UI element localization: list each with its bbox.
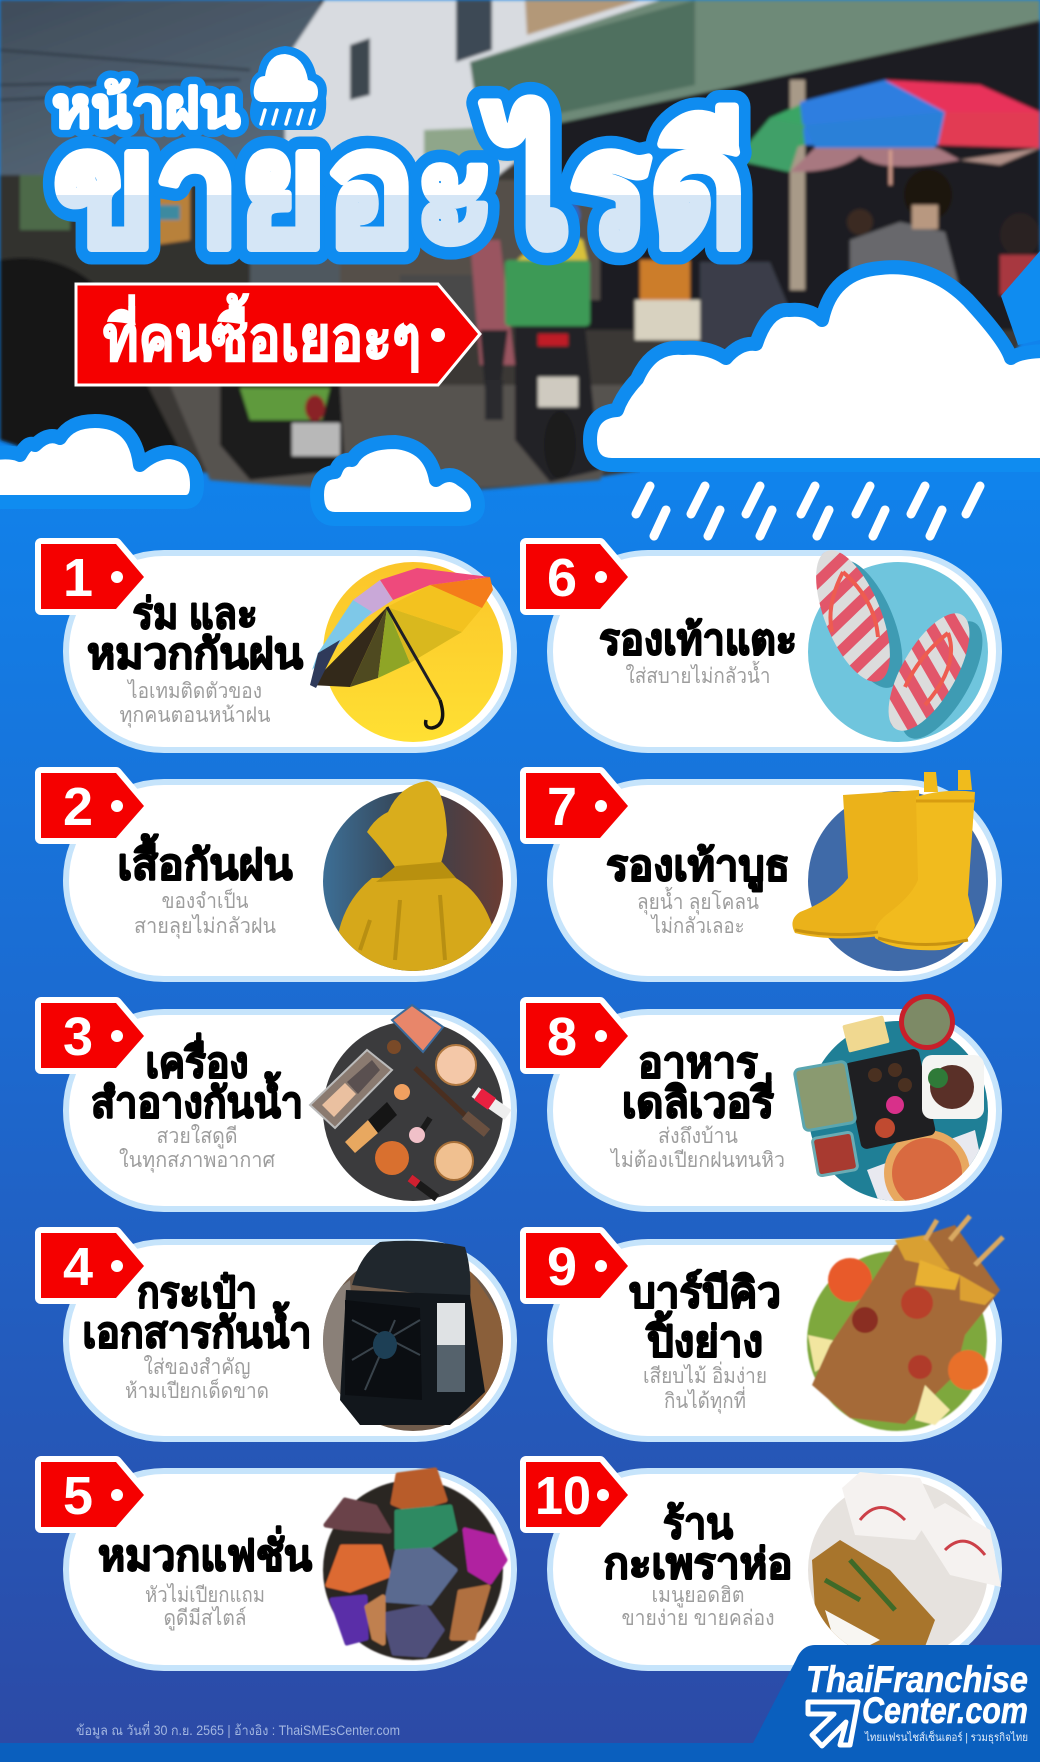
- image: umbrella on yellow: [310, 562, 503, 742]
- tag: number 8: 8: [547, 1007, 577, 1067]
- item 9 text: บาร์บีคิว: [629, 1269, 781, 1316]
- image: yellow raincoat: [323, 781, 503, 980]
- image: delivery food boxes: [794, 994, 990, 1216]
- panel: item 8 food delivery: [526, 994, 999, 1216]
- item 3 text: สวยใสดูดี: [156, 1124, 238, 1149]
- item 3 text: สำอางกันน้ำ: [91, 1071, 303, 1126]
- item 8 text: เดลิเวอรี่: [622, 1073, 774, 1126]
- panel: item 10 basil stir-fry shop: [526, 1462, 1001, 1668]
- image: black waterproof backpack: [323, 1241, 503, 1440]
- item 4 text: เอกสารกันน้ำ: [82, 1301, 312, 1356]
- item 8 text: ส่งถึงบ้าน: [658, 1125, 738, 1148]
- icon: rain cloud: [250, 46, 327, 130]
- small center cloud: [317, 442, 478, 519]
- panel: item 3 cosmetics: [41, 1003, 514, 1209]
- image: grilled skewers: [807, 1216, 1003, 1431]
- tag: number 5: 5: [63, 1466, 93, 1526]
- tag: number 5: [41, 1462, 144, 1527]
- title: main heading: ขายอะไรดี: [54, 99, 746, 279]
- item 7 text: ลุยน้ำ ลุยโคลน: [637, 887, 759, 915]
- title: small heading: หน้าฝน: [52, 76, 240, 139]
- image: cosmetics flat lay: [310, 1005, 508, 1201]
- item 10 text: เมนูยอดฮิต: [652, 1584, 744, 1608]
- item 1 text: หมวกกันฝน: [87, 630, 303, 677]
- rain streaks: [636, 486, 980, 536]
- image: basil pork rice and wrapped packs: [808, 1472, 1001, 1660]
- header photo: street market in the rain: [0, 0, 1040, 492]
- tag: number 2: 2: [63, 777, 93, 837]
- tag: number 9: [526, 1233, 628, 1298]
- item 4 text: ใส่ของสำคัญ: [144, 1355, 250, 1379]
- umbrella: [735, 80, 1040, 185]
- item 4 text: กระเป๋า: [137, 1269, 257, 1316]
- tag: number 3: [41, 1003, 144, 1068]
- item 10 text: ขายง่าย ขายคล่อง: [622, 1607, 774, 1630]
- panel: item 2 raincoat: [41, 773, 514, 980]
- panel: item 6 flip flops: [526, 541, 999, 751]
- image: striped flip flops: [801, 541, 998, 751]
- item 9 text: เสียบไม้ อิ่มง่าย: [643, 1361, 767, 1388]
- panel: item 1 umbrella: [41, 544, 514, 750]
- tag: number 8: [526, 1003, 628, 1068]
- item 9 text: กินได้ทุกที่: [664, 1386, 746, 1414]
- item 6 text: ใส่สบายไม่กลัวน้ำ: [626, 661, 770, 688]
- item 3 text: ในทุกสภาพอากาศ: [119, 1148, 276, 1173]
- small left cloud: [0, 421, 197, 502]
- item 7 text: [606, 842, 790, 938]
- logo: ThaiFranchise Center: [753, 1645, 1040, 1746]
- image: yellow rubber boots: [792, 770, 988, 971]
- corner of blue behind large cloud: [1001, 251, 1040, 345]
- parked motorbike: [220, 385, 345, 480]
- title: small heading: หน้าฝน: [52, 76, 240, 139]
- tag: number 4: [41, 1233, 144, 1298]
- item 7 text: รองเท้าบูธ: [606, 842, 790, 892]
- item 10 text: กะเพราห่อ: [604, 1540, 792, 1587]
- item 2 text: [118, 833, 293, 939]
- item 4 text: [82, 1269, 312, 1403]
- item 9 text: [629, 1269, 781, 1414]
- red banner: ที่คนซื้อเยอะๆ: [103, 293, 421, 374]
- source note: ข้อมูล ณ วันที่ 30 ก.ย. 2565 | อ้างอิง : ThaiSMEsCenter.com: [76, 1721, 400, 1739]
- item 2 text: เสื้อกันฝน: [118, 833, 293, 888]
- item 9 text: ปิ้งย่าง: [645, 1310, 763, 1365]
- item 3 text: [91, 1033, 303, 1173]
- item 8 text: [609, 1039, 785, 1172]
- tag: number 7: [526, 773, 628, 838]
- title: main heading: ขายอะไรดี: [54, 99, 746, 279]
- item 8 text: อาหาร: [638, 1039, 758, 1086]
- tag: number 10: [526, 1462, 628, 1527]
- item 8 text: ไม่ต้องเปียกฝนทนหิว: [609, 1148, 785, 1172]
- item 6 text: รองเท้าแตะ: [599, 616, 797, 663]
- item 4 text: ห้ามเปียกเด็ดขาด: [125, 1377, 269, 1403]
- image: colourful hats: [323, 1470, 505, 1660]
- tag: number 10: 10: [535, 1466, 591, 1526]
- panel: item 9 barbecue: [526, 1216, 1003, 1439]
- delivery rider on motorbike: [485, 198, 600, 482]
- item 7 text: ไม่กลัวเลอะ: [650, 914, 744, 938]
- item 5 text: หมวกแฟชั่น: [98, 1526, 312, 1579]
- tag: number 6: 6: [547, 548, 577, 608]
- item 5 text: [98, 1526, 312, 1631]
- item 10 text: [604, 1500, 792, 1630]
- band under large cloud: [640, 472, 1040, 500]
- item 6 text: [599, 616, 797, 688]
- large cloud: [590, 267, 1040, 465]
- icon: logo arrow: [808, 1702, 858, 1746]
- tag: number 4: 4: [63, 1237, 93, 1297]
- item 5 text: ดูดีมีสไตล์: [164, 1606, 246, 1631]
- item 2 text: ของจำเป็น: [162, 887, 248, 913]
- item 3 text: เครื่อง: [146, 1033, 248, 1086]
- item 1 text: ทุกคนตอนหน้าฝน: [120, 704, 270, 728]
- item 1 text: ไอเทมติดตัวของ: [126, 679, 262, 703]
- panel: item 7 rain boots: [526, 770, 999, 979]
- red banner: [76, 284, 480, 385]
- bottom band: [0, 1743, 1040, 1762]
- tag: number 2: [41, 773, 144, 838]
- tag: number 3: 3: [63, 1007, 93, 1067]
- tag: number 7: 7: [547, 777, 577, 837]
- item 1 text: [87, 590, 303, 728]
- tag: number 1: 1: [63, 548, 93, 608]
- tag: number 1: [41, 544, 144, 609]
- item 2 text: สายลุยไม่กลัวฝน: [134, 914, 276, 939]
- item 10 text: ร้าน: [663, 1500, 733, 1547]
- tag: number 9: 9: [547, 1237, 577, 1297]
- panel: item 5 fashion hats: [41, 1462, 514, 1668]
- item 1 text: ร่ม และ: [132, 590, 258, 637]
- panel: item 4 document bag: [41, 1233, 514, 1440]
- item 5 text: หัวไม่เปียกแถม: [145, 1583, 265, 1607]
- tag: number 6: [526, 544, 628, 609]
